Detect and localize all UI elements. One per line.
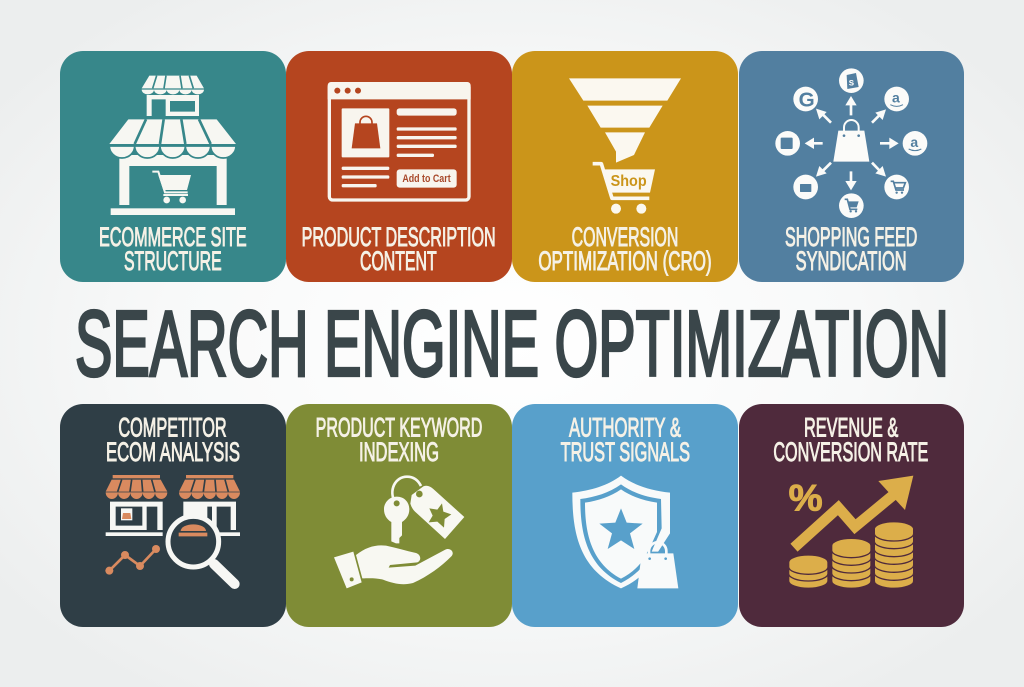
label: authority and trust signals: AUTHORITY & xyxy=(569,413,681,443)
label: competitor ecom analysis: ECOM ANALYSIS xyxy=(106,437,240,467)
icon: funnel into shop cart: Shop xyxy=(611,173,647,190)
label: conversion optimization xyxy=(538,222,712,276)
icon: product web page: Add to Cart xyxy=(402,173,451,185)
icon: shopping bag with channels: a xyxy=(892,90,900,106)
icon: storefront with cart xyxy=(109,76,236,215)
label: product description content xyxy=(302,222,496,276)
label: conversion optimization: OPTIMIZATION (CRO) xyxy=(538,246,712,276)
panel: authority and trust signals xyxy=(512,404,738,627)
label: shopping feed syndication: SHOPPING FEED xyxy=(785,222,917,252)
icon: shield with star and bag xyxy=(572,476,678,591)
label: revenue and conversion rate: REVENUE & xyxy=(804,413,898,443)
icon: shopping bag with channels: a xyxy=(910,134,918,150)
label: authority and trust signals: TRUST SIGNALS xyxy=(561,437,690,467)
label: product description content: CONTENT xyxy=(360,246,437,276)
label: conversion optimization: CONVERSION xyxy=(572,222,678,252)
panel: competitor ecom analysis xyxy=(60,404,286,627)
panel: ecommerce site structure xyxy=(60,51,286,282)
icon: competitor stores under magnifier xyxy=(105,475,240,584)
label: product description content: PRODUCT DESCRIPTION xyxy=(302,222,496,252)
icon: rising arrow, percent and coins: % xyxy=(789,476,823,518)
label: product keyword indexing: INDEXING xyxy=(359,437,439,467)
panel: revenue and conversion rate xyxy=(739,404,964,627)
label: product keyword indexing xyxy=(316,413,482,467)
label: ecommerce site structure: STRUCTURE xyxy=(124,246,222,276)
panel: product description content xyxy=(286,51,512,282)
label: shopping feed syndication: SYNDICATION xyxy=(796,246,907,276)
label: ecommerce site structure xyxy=(99,222,247,276)
icon: product web page xyxy=(328,82,471,200)
icon: shopping bag with channels: G xyxy=(799,88,815,111)
icon: funnel into shop cart xyxy=(569,78,681,214)
icon: shopping bag with channels xyxy=(775,68,927,218)
label: competitor ecom analysis: COMPETITOR xyxy=(118,413,227,443)
icon: hand holding key and tag xyxy=(334,477,464,588)
label: authority and trust signals xyxy=(561,413,690,467)
icon: rising arrow, percent and coins xyxy=(789,476,914,588)
panel: product keyword indexing xyxy=(286,404,512,627)
label: shopping feed syndication xyxy=(785,222,917,276)
label: revenue and conversion rate xyxy=(773,413,928,467)
label: ecommerce site structure: ECOMMERCE SITE xyxy=(99,222,247,252)
panel: conversion optimization xyxy=(512,51,738,282)
label: competitor ecom analysis xyxy=(106,413,240,467)
label: product keyword indexing: PRODUCT KEYWORD xyxy=(316,413,482,443)
panel: shopping feed syndication xyxy=(739,51,964,282)
icon: shopping bag with channels: s xyxy=(849,77,855,88)
